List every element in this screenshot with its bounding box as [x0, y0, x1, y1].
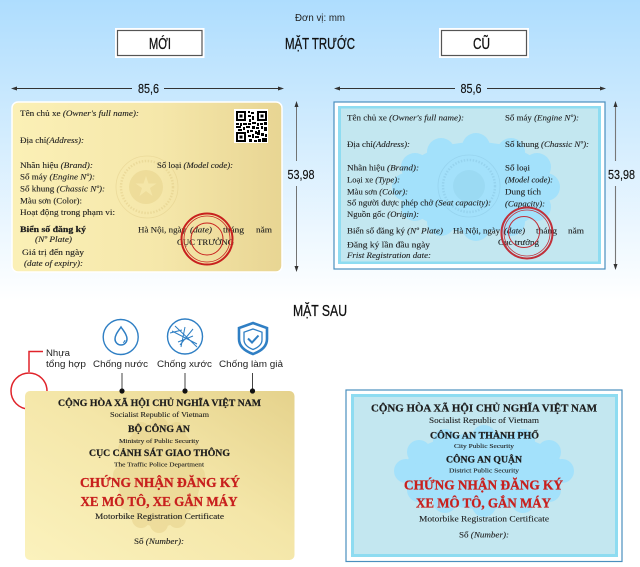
card text: Motorbike Registration Certificate	[95, 511, 224, 521]
signature block: (date)	[504, 226, 525, 236]
card text: Số (Number):	[134, 536, 184, 546]
label: water resistant: Chống nước	[93, 359, 148, 370]
card text: The Traffic Police Department	[114, 462, 204, 468]
field labels: Nhãn hiệu (Brand):	[20, 160, 93, 170]
emblem watermark	[438, 155, 500, 217]
field labels: Số máy (Engine Nº):	[505, 112, 579, 122]
field labels: (Model code):	[505, 174, 553, 184]
field labels: Đăng ký lần đầu ngày	[347, 240, 431, 250]
field labels: (Capacity):	[505, 198, 545, 208]
signature block: năm	[568, 226, 584, 236]
card text: Socialist Republic of Vietnam	[429, 416, 540, 425]
dimension: new card width	[11, 81, 284, 96]
field labels: Loại xe (Type):	[347, 174, 400, 184]
field labels: Số khung (Chassic Nº):	[505, 139, 589, 149]
field labels: Số loại (Model code):	[157, 160, 233, 170]
dimension: new card width: 85,6	[138, 81, 159, 96]
dimension: old card height	[608, 101, 635, 270]
card text: Ministry of Public Security	[119, 438, 200, 445]
field labels: Biển số đăng ký	[20, 224, 87, 234]
card text: Socialist Republic of Vietnam	[110, 411, 210, 419]
label box: old	[439, 28, 529, 58]
signature block: năm	[256, 224, 272, 234]
callout: synthetic plastic: tổng hợp	[46, 359, 86, 370]
dimension: new card height	[288, 101, 314, 272]
signature block: CỤC TRƯỞNG	[177, 237, 234, 247]
icon: water resistant	[103, 320, 138, 354]
callout: synthetic plastic: Nhựa	[46, 348, 71, 359]
QR code	[234, 109, 268, 143]
seal watermark	[113, 417, 205, 533]
signature block: Cục trưởng	[498, 237, 540, 247]
card text: XE MÔ TÔ, XE GẮN MÁY	[80, 493, 238, 510]
scalloped blob	[392, 133, 560, 241]
field labels: Tên chủ xe (Owner's full name):	[20, 108, 139, 118]
dimension: new card height: 53,98	[288, 167, 314, 182]
field labels	[346, 112, 589, 260]
card text: XE MÔ TÔ, GẮN MÁY	[416, 494, 551, 512]
field labels: Hoạt động trong phạm vi:	[20, 207, 115, 217]
panel: old card front	[334, 102, 605, 269]
icon: scratch resistant	[168, 319, 202, 354]
heading: front side: MẶT TRƯỚC	[285, 34, 355, 53]
signature block: tháng	[536, 226, 558, 236]
field labels: Địa chỉ(Address):	[20, 135, 84, 145]
feature pins	[119, 373, 255, 394]
panel: new card front	[12, 102, 282, 272]
signature block	[138, 224, 272, 247]
field labels: Số khung (Chassic Nº):	[20, 184, 105, 194]
field labels: Số người được phép chở (Seat capacity):	[347, 198, 491, 208]
card text: CỤC CẢNH SÁT GIAO THÔNG	[89, 446, 231, 459]
signature block: tháng	[223, 224, 245, 234]
heading: back side: MẶT SAU	[293, 301, 347, 320]
red stamp	[502, 208, 552, 258]
field labels: Màu sơn (Color):	[20, 196, 82, 206]
field labels	[20, 108, 233, 268]
field labels: (date of expiry):	[24, 258, 83, 268]
label box: new: MỚI	[149, 34, 171, 53]
field labels: Tên chủ xe (Owner's full name):	[347, 112, 464, 122]
card text: CỘNG HÒA XÃ HỘI CHỦ NGHĨA VIỆT NAM	[371, 402, 597, 415]
card text: BỘ CÔNG AN	[128, 422, 190, 435]
card text: CHỨNG NHẬN ĐĂNG KÝ	[404, 476, 563, 494]
card text: District Public Security	[449, 467, 520, 474]
unit note: Đơn vị: mm	[295, 12, 345, 24]
dimension: old card width: 85,6	[460, 81, 482, 96]
card text: Số (Number):	[459, 530, 509, 540]
callout: synthetic plastic	[11, 348, 86, 409]
card text: CÔNG AN THÀNH PHỐ	[430, 429, 539, 442]
label: scratch resistant: Chống xước	[157, 359, 212, 370]
red stamp	[182, 214, 232, 264]
signature block: Hà Nội, ngày	[453, 226, 501, 236]
signature block: Hà Nội, ngày	[138, 224, 187, 234]
field labels: Giá trị đến ngày	[22, 247, 85, 257]
card text: City Public Security	[454, 443, 515, 450]
card text	[371, 402, 597, 540]
card text: Motorbike Registration Certificate	[419, 513, 549, 523]
icon: anti-counterfeit shield	[239, 323, 267, 354]
label: anti-counterfeit: Chống làm giả	[219, 359, 284, 370]
dimension: old card height: 53,98	[608, 167, 635, 182]
signature block	[453, 226, 584, 247]
field labels: Địa chỉ(Address):	[347, 139, 410, 149]
field labels: Số máy (Engine Nº):	[20, 172, 95, 182]
dimension: old card width	[334, 81, 606, 96]
card text	[58, 396, 261, 546]
card text: CÔNG AN QUẬN	[446, 452, 522, 465]
label box: new	[115, 28, 204, 58]
signature block: (date)	[190, 224, 212, 234]
label box: old: CŨ	[473, 33, 490, 53]
background	[0, 0, 640, 300]
field labels: Frist Registration date:	[346, 250, 431, 260]
field labels: Màu sơn (Color):	[347, 186, 408, 196]
field labels: Dung tích	[505, 186, 542, 196]
field labels: Biển số đăng ký (Nº Plate)	[347, 226, 443, 236]
field labels: (Nº Plate)	[35, 234, 72, 244]
field labels: Số loại	[505, 162, 531, 172]
field labels: Nguồn gốc (Origin):	[347, 209, 419, 219]
card text: CHỨNG NHẬN ĐĂNG KÝ	[80, 474, 240, 491]
field labels: Nhãn hiệu (Brand):	[347, 162, 419, 172]
card text: CỘNG HÒA XÃ HỘI CHỦ NGHĨA VIỆT NAM	[58, 396, 261, 409]
emblem watermark	[116, 156, 178, 218]
panel: new card back	[25, 391, 294, 560]
scalloped blob	[394, 425, 574, 517]
panel: old card back	[346, 390, 622, 562]
